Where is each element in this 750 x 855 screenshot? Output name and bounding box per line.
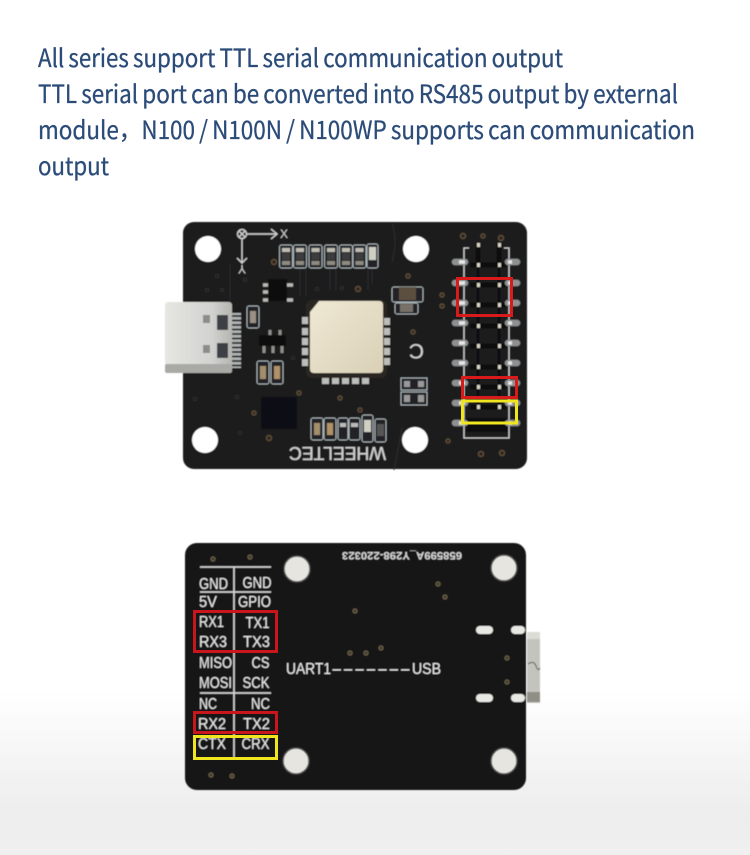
pin labels: NC xyxy=(251,696,270,713)
faint traces xyxy=(230,223,402,470)
UART label: ------- xyxy=(331,661,411,678)
UART label: USB xyxy=(412,661,441,678)
UART label xyxy=(286,661,441,678)
pin header xyxy=(455,243,517,438)
USB-C connector xyxy=(165,302,241,373)
pin labels xyxy=(198,575,272,753)
main sensor module xyxy=(302,300,390,384)
heading text block: All series support TTL serial communication output xyxy=(38,39,564,75)
icon: axis marker: Y xyxy=(238,262,246,276)
pin labels: MOSI xyxy=(199,675,232,692)
heading text block: TTL serial port can be converted into RS485 output by external xyxy=(38,75,678,111)
mounting holes xyxy=(283,555,517,774)
brand silkscreen: WHEELTEC xyxy=(289,443,386,463)
pin labels: RX3 xyxy=(199,634,227,651)
pin labels: 5V xyxy=(199,594,218,611)
yellow highlight box xyxy=(462,401,516,423)
vias xyxy=(252,234,504,456)
pin table lines xyxy=(200,567,271,757)
UART label: UART1 xyxy=(286,661,331,678)
bottom component row xyxy=(311,415,386,442)
red highlight boxes xyxy=(458,278,516,398)
pin labels: GND xyxy=(242,575,272,592)
pin labels: NC xyxy=(199,696,217,713)
pin labels: TX3 xyxy=(243,634,270,651)
pin labels: CS xyxy=(252,655,270,672)
vias xyxy=(209,555,509,778)
pin labels: TX2 xyxy=(243,716,270,733)
front PCB body xyxy=(183,222,527,469)
silk letter C: C xyxy=(409,339,424,362)
pin labels: SCK xyxy=(242,675,270,692)
mounting holes xyxy=(192,236,429,453)
pin labels: GPIO xyxy=(238,594,271,611)
front PCB artwork xyxy=(165,222,527,470)
pin labels: RX2 xyxy=(198,716,226,733)
icon: axis marker xyxy=(237,227,288,276)
USB solder pads and connector xyxy=(476,626,540,703)
top component row xyxy=(280,244,378,268)
back PCB body xyxy=(185,543,526,790)
pin labels: MISO xyxy=(199,655,232,672)
pin labels: CRX xyxy=(242,736,270,753)
pin labels: RX1 xyxy=(199,614,224,631)
back PCB artwork xyxy=(185,543,540,790)
heading text block xyxy=(38,39,695,183)
red highlight boxes xyxy=(194,612,276,732)
small ICs xyxy=(247,279,427,429)
pin labels: TX1 xyxy=(246,615,270,632)
panel: board back xyxy=(185,543,540,790)
panel: board front xyxy=(165,222,527,470)
yellow highlight box xyxy=(194,736,276,758)
heading text block: module，N100 / N100N / N100WP supports can communication xyxy=(38,111,695,147)
heading text block: output xyxy=(38,147,110,183)
batch code: 658599A_Y298-220323 xyxy=(342,549,462,561)
pin labels: GND xyxy=(199,576,228,593)
icon: axis marker: X xyxy=(280,227,288,241)
pin labels: CTX xyxy=(198,736,227,753)
